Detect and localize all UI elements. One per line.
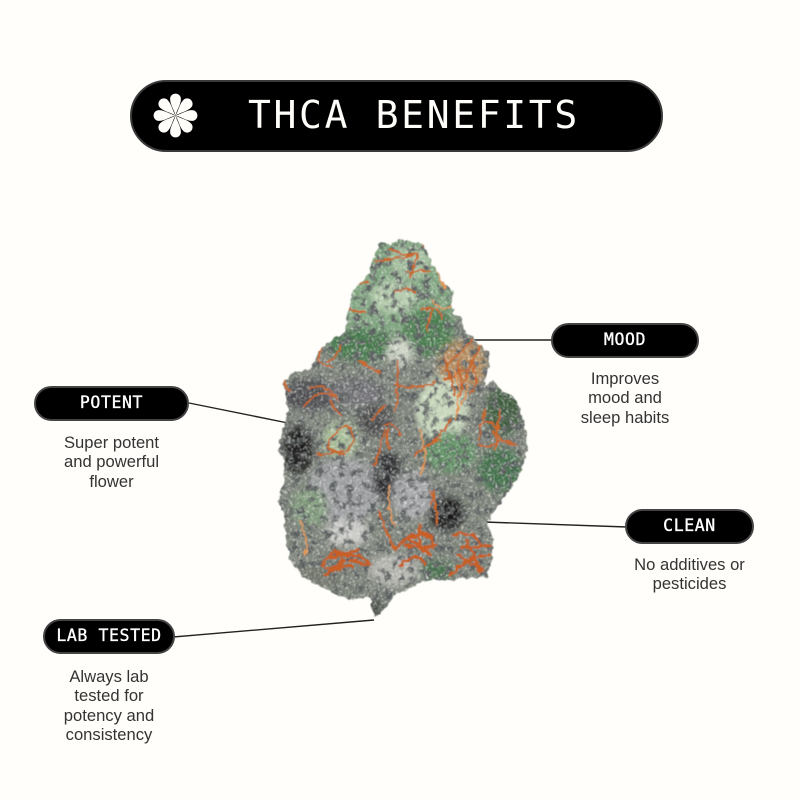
label: mood [551, 323, 699, 358]
text: mood: mood and [588, 388, 662, 407]
label: clean: CLEAN [663, 516, 716, 535]
label: potent: POTENT [80, 393, 143, 412]
text: clean [634, 555, 745, 593]
text: potent: flower [89, 472, 134, 491]
illustration: cannabis flower bud [277, 238, 529, 618]
label: lab tested [43, 619, 175, 654]
text: lab tested: tested for [74, 686, 144, 705]
label: potent [34, 386, 189, 421]
text: clean: pesticides [653, 574, 726, 593]
text: lab tested: potency and [64, 706, 154, 725]
text: lab tested: consistency [66, 725, 152, 744]
text: clean: No additives or [634, 555, 745, 574]
heading: THCA BENEFITS [248, 93, 580, 137]
text: lab tested: Always lab [69, 667, 149, 686]
label: mood: MOOD [604, 330, 646, 349]
title pill [130, 80, 663, 152]
text: potent: and powerful [64, 452, 159, 471]
label: clean [625, 509, 754, 544]
orange pistil hairs [285, 238, 517, 550]
text: potent [64, 433, 159, 491]
text: lab tested [64, 667, 154, 744]
text: mood: sleep habits [581, 408, 669, 427]
text: potent: Super potent [64, 433, 159, 452]
text: mood [581, 369, 669, 427]
text: mood: Improves [591, 369, 659, 388]
label: lab tested: LAB TESTED [56, 626, 162, 645]
